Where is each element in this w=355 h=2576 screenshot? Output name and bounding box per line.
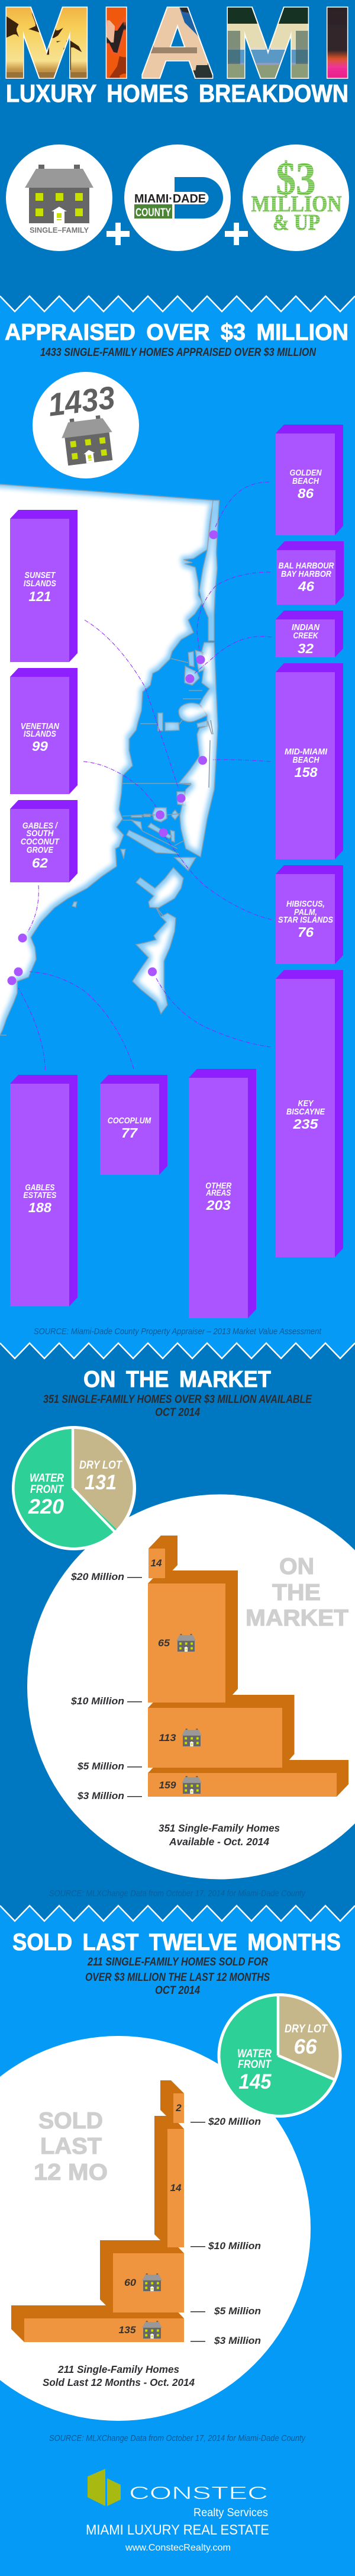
bar: Indian Creek 32: INDIAN bbox=[292, 623, 320, 632]
pie chart: water front vs dry lot, market: WATER bbox=[30, 1472, 64, 1485]
source note: MLXChange sold: SOURCE: MLXChange Data from October 17, 2014 for Miami-Dade County bbox=[49, 2434, 306, 2443]
pie chart: water front vs dry lot, sold: DRY LOT bbox=[285, 2023, 328, 2035]
subheading: 211 homes sold: OCT 2014 bbox=[155, 1984, 200, 1997]
bar: Hibiscus, Palm, Star Islands 76: 76 bbox=[298, 924, 314, 940]
pie chart: water front vs dry lot, sold: FRONT bbox=[238, 2058, 272, 2071]
bar: $3M-$5M 159 bbox=[148, 1760, 348, 1797]
bar: $10M-$20M 14: 14 bbox=[170, 2182, 182, 2193]
watermark: sold last 12 mo bbox=[34, 2108, 108, 2185]
bar: Bal Harbour Bay Harbor 46: 46 bbox=[298, 579, 314, 594]
bar: Mid-Miami Beach 158: MID-MIAMI bbox=[285, 747, 328, 757]
bar: Indian Creek 32: CREEK bbox=[293, 631, 319, 641]
axis: market price ticks: $20 Million bbox=[70, 1571, 124, 1582]
bar: Bal Harbour Bay Harbor 46 bbox=[276, 541, 344, 605]
bar: $5M-$10M 60: 60 bbox=[124, 2277, 137, 2288]
bar: $5M-$10M 60 bbox=[100, 2240, 184, 2312]
bar: Gables Estates 188: ESTATES bbox=[23, 1191, 57, 1200]
subheading: 351 homes available bbox=[43, 1393, 312, 1419]
criteria: Miami-Dade County circle bbox=[124, 144, 231, 251]
icon: plus bbox=[106, 223, 130, 245]
axis: market price ticks: $10 Million bbox=[70, 1695, 124, 1707]
logo: Constec Realty Services: CONSTEC bbox=[129, 2482, 268, 2503]
bar: Mid-Miami Beach 158: BEACH bbox=[292, 756, 320, 765]
source note: MLXChange market: SOURCE: MLXChange Data from October 17, 2014 for Miami-Dade County bbox=[49, 1889, 306, 1899]
number: 1433: 1433 bbox=[46, 380, 117, 423]
criteria: $3 million and up circle: $3 bbox=[276, 153, 316, 204]
bar: over $20M 2 bbox=[160, 2080, 184, 2123]
bar: Venetian Islands 99: ISLANDS bbox=[24, 730, 56, 739]
map location dots bbox=[7, 531, 218, 985]
icon: green hexagon mark bbox=[88, 2469, 121, 2506]
bar: Gables / South Coconut Grove 62 bbox=[10, 800, 78, 882]
criteria: $3 million and up circle: & UP bbox=[273, 210, 320, 235]
axis: market price ticks: $3 Million bbox=[77, 1790, 124, 1801]
bar: Bal Harbour Bay Harbor 46: BAL HARBOUR bbox=[278, 561, 334, 571]
bar: Cocoplum 77 bbox=[100, 1075, 167, 1175]
bar: Mid-Miami Beach 158 bbox=[276, 663, 343, 859]
caption: 211 homes sold bbox=[43, 2363, 195, 2388]
panel: on the market white circle bbox=[27, 1495, 355, 1880]
bar: Other Areas 203: 203 bbox=[206, 1197, 231, 1213]
footer: website: www.ConstecRealty.com bbox=[125, 2543, 231, 2553]
bar: Venetian Islands 99 bbox=[10, 668, 78, 794]
chart: sold stepped bars bbox=[11, 2080, 184, 2342]
bar: Gables Estates 188 bbox=[10, 1075, 78, 1306]
subheading: 351 homes available: OCT 2014 bbox=[155, 1406, 200, 1419]
bar: Gables Estates 188: GABLES bbox=[25, 1183, 55, 1193]
caption: 351 homes available: Available - Oct. 2014 bbox=[169, 1836, 269, 1848]
bar: Indian Creek 32 bbox=[276, 611, 343, 657]
bar: Indian Creek 32: 32 bbox=[298, 641, 314, 656]
icon: house bbox=[25, 165, 93, 223]
bar: Hibiscus, Palm, Star Islands 76 bbox=[276, 865, 343, 964]
bar: Sunset Islands 121 bbox=[10, 510, 78, 662]
bar: Key Biscayne 235 bbox=[276, 970, 343, 1257]
bar: $3M-$5M 135: 135 bbox=[118, 2324, 136, 2336]
bar: over $20M 14: 14 bbox=[150, 1557, 162, 1569]
bar: Sunset Islands 121: 121 bbox=[28, 589, 51, 604]
title: MIAMI picture letters bbox=[0, 0, 354, 98]
criteria: $3 million and up circle bbox=[243, 144, 349, 251]
bar: Key Biscayne 235: 235 bbox=[292, 1116, 319, 1132]
heading: appraised over $3 million: APPRAISED OVER $3 MILLION bbox=[5, 320, 348, 345]
caption: 211 homes sold: 211 Single-Family Homes bbox=[57, 2363, 179, 2375]
pie chart: water front vs dry lot, market: 131 bbox=[85, 1471, 117, 1494]
watermark: on the market: THE bbox=[272, 1580, 321, 1605]
subheading: 211 homes sold bbox=[85, 1956, 270, 1997]
heading: on the market: ON THE MARKET bbox=[83, 1367, 271, 1392]
bar: Golden Beach 86: GOLDEN bbox=[290, 468, 322, 478]
bar: Other Areas 203: OTHER bbox=[205, 1181, 232, 1191]
caption: 351 homes available: 351 Single-Family Homes bbox=[159, 1822, 280, 1834]
bar: $10M-$20M 14 bbox=[154, 2116, 184, 2247]
axis: market price ticks bbox=[70, 1571, 142, 1801]
leader lines from map to bars bbox=[18, 482, 272, 1070]
watermark: on the market: MARKET bbox=[246, 1605, 348, 1631]
pie chart: water front vs dry lot, market: 220 bbox=[28, 1495, 64, 1518]
pie chart: water front vs dry lot, market: DRY LOT bbox=[79, 1459, 122, 1472]
axis: sold price ticks: $20 Million bbox=[208, 2116, 261, 2127]
bar: Cocoplum 77: COCOPLUM bbox=[108, 1116, 151, 1126]
watermark: sold last 12 mo: 12 MO bbox=[34, 2160, 108, 2185]
bar: Hibiscus, Palm, Star Islands 76: STAR ISLANDS bbox=[278, 916, 333, 925]
axis: sold price ticks: $10 Million bbox=[208, 2240, 261, 2251]
bar: $10M-$20M 65: 65 bbox=[158, 1637, 170, 1649]
bar: Golden Beach 86: 86 bbox=[298, 486, 314, 501]
bar: Mid-Miami Beach 158: 158 bbox=[295, 765, 318, 780]
axis: market price ticks: $5 Million bbox=[77, 1761, 124, 1772]
footer: miami luxury real estate: MIAMI LUXURY REAL ESTATE bbox=[86, 2522, 269, 2538]
subheading: 211 homes sold: 211 SINGLE-FAMILY HOMES SOLD FOR bbox=[87, 1956, 268, 1968]
bar: $3M-$5M 135 bbox=[11, 2305, 184, 2342]
source note: property appraiser: SOURCE: Miami-Dade County Property Appraiser – 2013 Market Value Assessment bbox=[34, 1327, 322, 1337]
background: dark blue header band bbox=[0, 0, 355, 311]
bar: $5M-$10M 113: 113 bbox=[159, 1732, 176, 1743]
bar: Golden Beach 86 bbox=[276, 425, 343, 535]
bar: $10M-$20M 65 bbox=[148, 1570, 238, 1703]
panel: sold white circle bbox=[0, 2036, 311, 2421]
icon: tilted house bbox=[60, 414, 115, 466]
caption: 351 homes available bbox=[159, 1822, 280, 1848]
bar: Gables / South Coconut Grove 62: 62 bbox=[32, 855, 48, 871]
bar: $3M-$5M 159: 159 bbox=[159, 1780, 176, 1791]
bar: Hibiscus, Palm, Star Islands 76: HIBISCUS, bbox=[286, 900, 325, 909]
bar: Key Biscayne 235: KEY bbox=[298, 1099, 314, 1109]
logo: county label: COUNTY bbox=[135, 207, 171, 219]
callout: 1433 homes circle bbox=[33, 372, 139, 478]
icon: plus bbox=[225, 223, 248, 245]
chart: on the market stepped bars bbox=[148, 1536, 348, 1797]
bar: Gables Estates 188: 188 bbox=[28, 1200, 51, 1215]
pie chart: water front vs dry lot, sold: 145 bbox=[239, 2070, 272, 2093]
pie chart: water front vs dry lot, sold: WATER bbox=[237, 2048, 272, 2060]
bar: Bal Harbour Bay Harbor 46: BAY HARBOR bbox=[281, 570, 331, 579]
bar: Hibiscus, Palm, Star Islands 76: PALM, bbox=[294, 908, 317, 917]
watermark: on the market: ON bbox=[279, 1554, 314, 1579]
criteria: $3 million and up circle: MILLION bbox=[251, 191, 342, 217]
bar: $5M-$10M 113 bbox=[148, 1695, 295, 1768]
pie chart: water front vs dry lot, market: FRONT bbox=[30, 1483, 64, 1496]
bar: Cocoplum 77: 77 bbox=[121, 1125, 138, 1141]
pie chart: water front vs dry lot, sold: 66 bbox=[293, 2035, 317, 2058]
bar: Other Areas 203: AREAS bbox=[205, 1189, 231, 1198]
bar: Sunset Islands 121: ISLANDS bbox=[24, 579, 56, 589]
bar: Venetian Islands 99: 99 bbox=[32, 738, 48, 754]
bar: Golden Beach 86: BEACH bbox=[292, 477, 319, 486]
label: single-family: SINGLE–FAMILY bbox=[30, 226, 89, 235]
pie chart: water front vs dry lot, market bbox=[12, 1426, 136, 1550]
watermark: on the market bbox=[246, 1554, 348, 1631]
watermark: sold last 12 mo: SOLD bbox=[38, 2108, 103, 2134]
bar: Gables / South Coconut Grove 62: GABLES / bbox=[22, 821, 59, 831]
axis: sold price ticks bbox=[191, 2116, 261, 2346]
bar: Key Biscayne 235: BISCAYNE bbox=[286, 1107, 325, 1117]
logo: Constec Realty Services bbox=[88, 2469, 268, 2519]
criteria: single-family circle bbox=[6, 144, 112, 251]
logo: Miami-Dade wordmark: MIAMI·DADE bbox=[134, 192, 206, 205]
caption: 211 homes sold: Sold Last 12 Months - Oct. 2014 bbox=[43, 2376, 195, 2388]
bar: Gables / South Coconut Grove 62: SOUTH bbox=[26, 829, 54, 839]
axis: sold price ticks: $5 Million bbox=[214, 2305, 261, 2317]
logo: Constec Realty Services: Realty Services bbox=[193, 2507, 268, 2519]
axis: sold price ticks: $3 Million bbox=[214, 2335, 261, 2346]
watermark: sold last 12 mo: LAST bbox=[40, 2134, 102, 2159]
subheading: 211 homes sold: OVER $3 MILLION THE LAST 12 MONTHS bbox=[85, 1971, 270, 1984]
bar: Gables / South Coconut Grove 62: GROVE bbox=[27, 846, 54, 855]
bar: Gables / South Coconut Grove 62: COCONUT bbox=[21, 837, 60, 847]
background: dark blue on-the-market band bbox=[0, 1343, 355, 1921]
bar: over $20M 14 bbox=[149, 1536, 178, 1578]
subheading: 351 homes available: 351 SINGLE-FAMILY HOMES OVER $3 MILLION AVAILABLE bbox=[43, 1393, 312, 1406]
bar: Other Areas 203 bbox=[189, 1069, 256, 1318]
bar: Venetian Islands 99: VENETIAN bbox=[21, 722, 59, 731]
logo: D shape bbox=[175, 177, 223, 219]
bar: Sunset Islands 121: SUNSET bbox=[24, 571, 56, 580]
map: Miami coastline bbox=[0, 483, 219, 1035]
bar: over $20M 2: 2 bbox=[175, 2102, 182, 2114]
pie chart: water front vs dry lot, sold bbox=[218, 1993, 342, 2118]
